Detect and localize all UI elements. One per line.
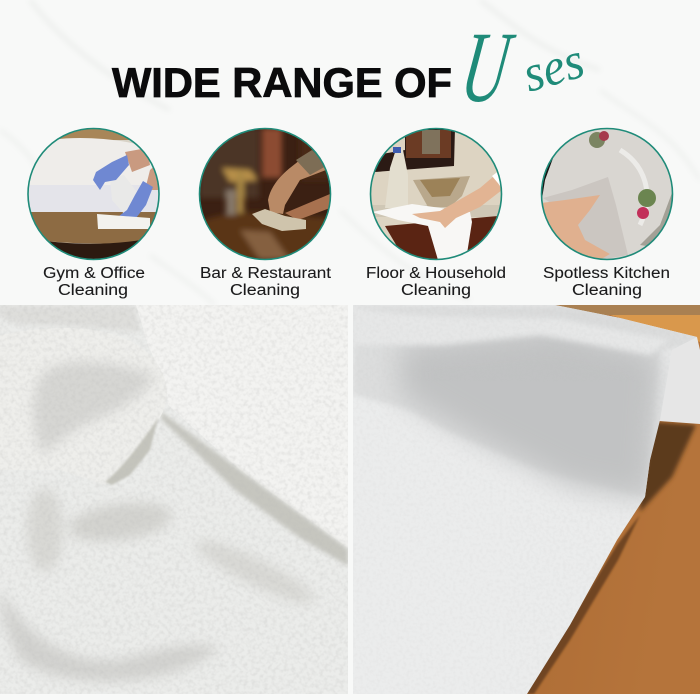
lower fold shadow — [0, 590, 220, 681]
caption: bar and restaurant: Bar & Restaurant — [200, 265, 332, 282]
heading text: WIDE RANGE OF — [112, 59, 452, 106]
caption: gym and office: Gym & Office — [43, 265, 145, 282]
crease — [105, 418, 158, 485]
big fold highlight — [159, 411, 163, 418]
left photo: towel close-up — [0, 305, 348, 694]
terry texture — [0, 305, 348, 694]
upper right flap — [136, 305, 146, 332]
towel roll end — [659, 337, 700, 424]
caption: gym and office — [43, 265, 145, 299]
script word: Uses — [455, 12, 590, 124]
circle ring — [28, 128, 159, 260]
top-left fold — [0, 305, 140, 332]
captions — [43, 265, 670, 299]
caption: floor and household — [366, 265, 506, 299]
circle ring — [542, 128, 672, 260]
caption: spotless kitchen — [543, 265, 670, 299]
mid shadow — [69, 500, 172, 544]
circle ring — [200, 128, 330, 260]
flap shadow edge — [160, 411, 348, 566]
shaded upper area — [353, 305, 700, 497]
circle ring — [370, 128, 502, 260]
circle photo: gym and office cleaning — [27, 128, 161, 260]
caption: spotless kitchen: Cleaning — [572, 282, 642, 299]
towel shadow on table — [640, 422, 696, 512]
script word: Uses: U — [455, 12, 520, 124]
circle photo: floor and household cleaning — [370, 128, 502, 260]
right photo: towel on wooden table — [353, 305, 700, 694]
title: Wide Range of Uses — [112, 12, 590, 124]
towel body — [353, 305, 700, 694]
caption: bar and restaurant: Cleaning — [230, 282, 300, 299]
circle photo: spotless kitchen cleaning — [541, 128, 673, 262]
script word: Uses: ses — [516, 31, 590, 103]
wooden table — [527, 315, 700, 694]
caption: floor and household: Cleaning — [401, 282, 471, 299]
caption: spotless kitchen: Spotless Kitchen — [543, 265, 670, 282]
caption: bar and restaurant — [200, 265, 332, 299]
caption: gym and office: Cleaning — [58, 282, 128, 299]
caption: floor and household: Floor & Household — [366, 265, 506, 282]
fold hollow — [33, 362, 155, 455]
circle photo: bar and restaurant cleaning — [199, 128, 331, 260]
